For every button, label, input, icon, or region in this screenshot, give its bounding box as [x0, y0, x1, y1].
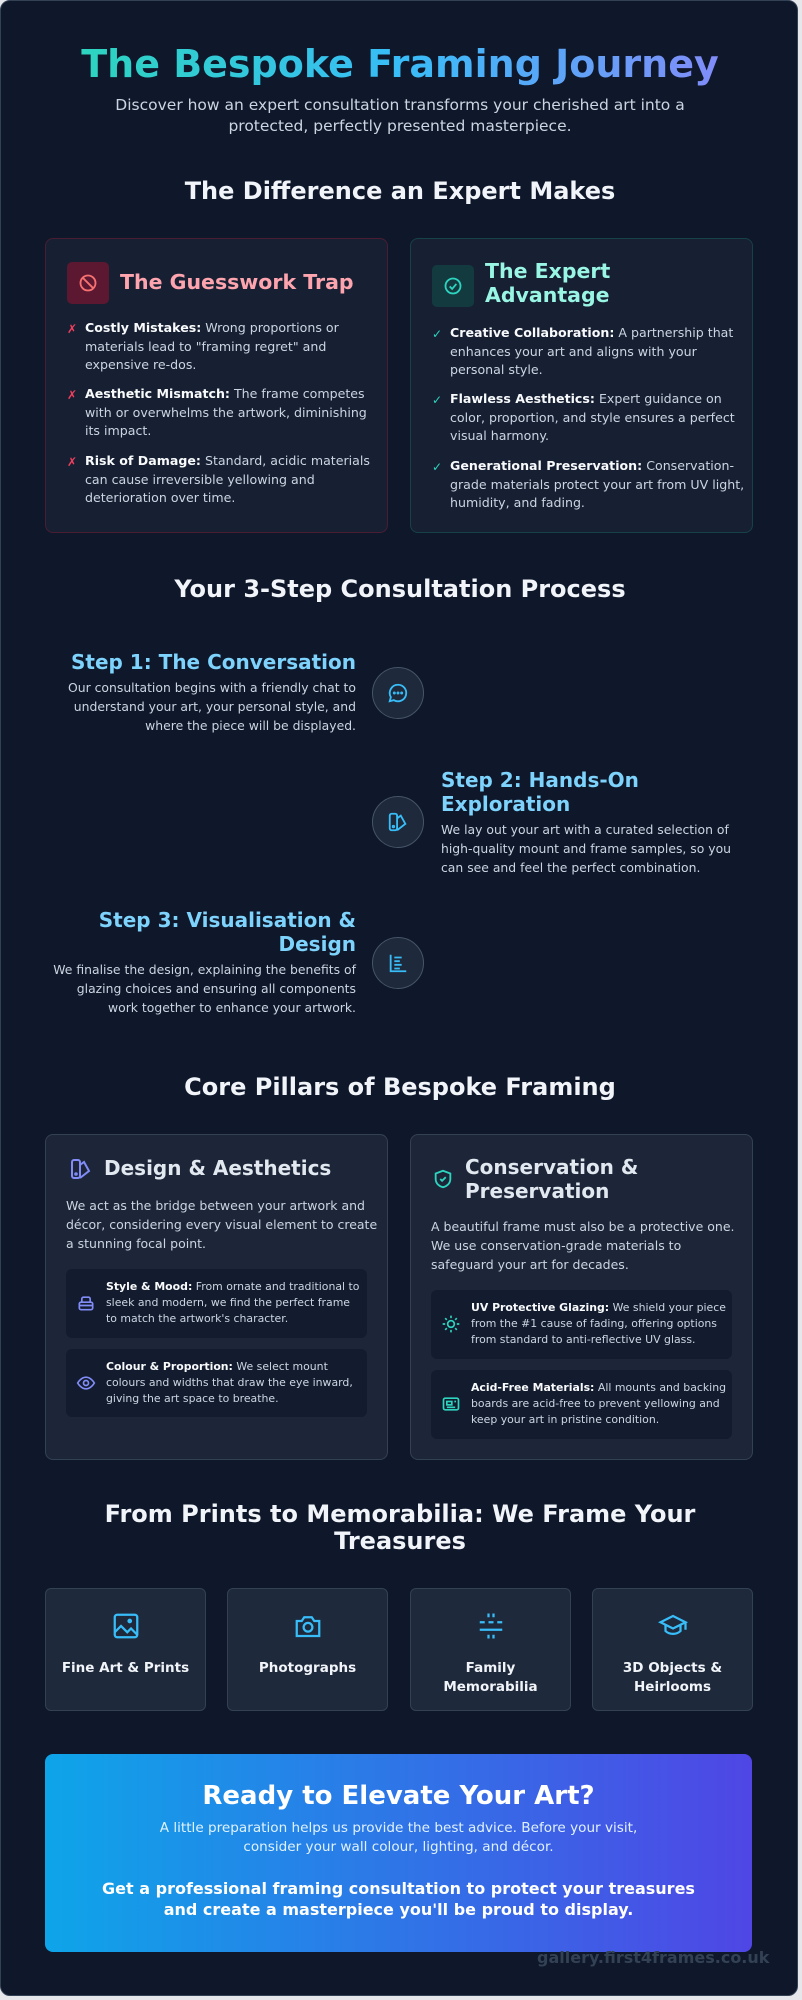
- step 1: [68, 650, 356, 733]
- list: aesthetics: Flawless Aesthetics: Expert guidance on color, proportion, and style ensures a perfect visual harmony.: [450, 391, 735, 443]
- CTA text: A little preparation helps us provide the best advice. Before your visit,: [160, 1820, 637, 1836]
- panel: conservation: [410, 1134, 753, 1460]
- list: collaboration: Creative Collaboration: A partnership that enhances your art and aligns with your personal style.: [450, 325, 733, 377]
- heading: pillars: Core Pillars of Bespoke Framing: [184, 1073, 616, 1101]
- icon: design: [372, 937, 424, 989]
- heading: treasures: Treasures: [334, 1527, 466, 1555]
- list: mistakes: Costly Mistakes: Wrong proportions or materials lead to "framing regret" and expensive re-dos.: [85, 320, 339, 372]
- sub: style: Style & Mood: From ornate and traditional to sleek and modern, we find the perfect frame to match the artwork's character.: [106, 1280, 359, 1325]
- text: conservation: A beautiful frame must also be a protective one. We use conservation-grade materials to safeguard your art for decades.: [431, 1219, 734, 1272]
- watermark: gallery.first4frames.co.uk: [537, 1948, 769, 1967]
- card: memorabilia: [410, 1588, 571, 1711]
- CTA heading: Ready to Elevate Your Art?: [202, 1781, 595, 1811]
- panel: guesswork trap: ✗: [67, 455, 77, 469]
- heading: difference: The Difference an Expert Makes: [185, 177, 615, 205]
- card: memorabilia: Memorabilia: [443, 1679, 538, 1695]
- card: 3d objects: 3D Objects &: [623, 1660, 722, 1676]
- panel: expert advantage: ✓: [432, 460, 442, 474]
- CTA text: consider your wall colour, lighting, and décor.: [243, 1839, 554, 1855]
- sub: colour: Colour & Proportion: We select mount colours and widths that draw the eye inward, giving the art space to breathe.: [106, 1360, 353, 1405]
- icon: check: [432, 265, 474, 307]
- step 3: We finalise the design, explaining the benefits of glazing choices and ensuring all components work together to enhance your artwork.: [53, 962, 356, 1015]
- CTA text: [160, 1820, 637, 1855]
- panel: design: [45, 1134, 388, 1460]
- step 3: [53, 908, 356, 1015]
- step 3: Design: [279, 932, 356, 956]
- heading: conservation: Conservation &: [465, 1155, 638, 1179]
- sub: colour: [66, 1349, 367, 1417]
- subtitle: [115, 96, 685, 135]
- card: memorabilia: Family: [466, 1660, 515, 1676]
- card: photographs: [227, 1588, 388, 1711]
- list: mismatch: Aesthetic Mismatch: The frame competes with or overwhelms the artwork, diminishing its impact.: [85, 386, 367, 438]
- list: preservation: Generational Preservation: Conservation-grade materials protect your art from UV light, humidity, and fading.: [450, 458, 744, 510]
- subtitle: protected, perfectly presented masterpiece.: [228, 117, 572, 135]
- sub: acid-free: [431, 1370, 732, 1439]
- step 2: [441, 768, 731, 875]
- CTA bold: Get a professional framing consultation to protect your treasures: [102, 1879, 695, 1898]
- icon: shield: [434, 1170, 452, 1188]
- heading: treasures: From Prints to Memorabilia: We Frame Your: [105, 1500, 695, 1528]
- heading: expert: Advantage: [485, 283, 610, 307]
- icon: ban: [67, 262, 109, 304]
- title: The Bespoke Framing Journey: [81, 42, 719, 86]
- sub: acid-free: Acid-Free Materials: All mounts and backing boards are acid-free to prevent yellowing and keep your art in pristine condition.: [471, 1381, 726, 1426]
- CTA bold: [102, 1879, 695, 1919]
- heading: expert: [485, 259, 610, 307]
- card: photographs: Photographs: [259, 1660, 356, 1676]
- CTA bold: and create a masterpiece you'll be proud to display.: [164, 1900, 633, 1919]
- panel: guesswork trap: [45, 238, 388, 533]
- sub: UV: UV Protective Glazing: We shield your piece from the #1 cause of fading, offering options from standard to anti-reflective UV glass.: [471, 1301, 726, 1346]
- card: 3d objects: [592, 1588, 753, 1711]
- panel: expert advantage: ✓: [432, 393, 442, 407]
- heading: conservation: [465, 1155, 638, 1203]
- step 3: Step 3: Visualisation &: [99, 908, 356, 932]
- subtitle: Discover how an expert consultation transforms your cherished art into a: [115, 96, 685, 114]
- icon: palette: [71, 1159, 90, 1179]
- text: design: We act as the bridge between your artwork and décor, considering every visual element to create a stunning focal point.: [66, 1198, 377, 1251]
- list: damage: Risk of Damage: Standard, acidic materials can cause irreversible yellowing and deterioration over time.: [85, 453, 370, 505]
- panel: expert advantage: ✓: [432, 327, 442, 341]
- sub: UV: [431, 1290, 732, 1359]
- heading: process: Your 3-Step Consultation Process: [174, 575, 626, 603]
- icon: swatch: [372, 796, 424, 848]
- step 1: Step 1: The Conversation: [71, 650, 356, 674]
- panel: guesswork trap: ✗: [67, 322, 77, 336]
- CTA banner: [45, 1754, 752, 1952]
- panel: expert advantage: [410, 238, 753, 533]
- card: fine art: Fine Art & Prints: [62, 1660, 189, 1676]
- panel: guesswork trap: ✗: [67, 388, 77, 402]
- card: fine art: [45, 1588, 206, 1711]
- heading: guesswork: The Guesswork Trap: [120, 270, 354, 294]
- sub: style: [66, 1269, 367, 1338]
- icon: chat: [372, 667, 424, 719]
- heading: conservation: Preservation: [465, 1179, 609, 1203]
- heading: treasures: [105, 1500, 696, 1555]
- card: 3d objects: Heirlooms: [634, 1679, 711, 1695]
- step 2: We lay out your art with a curated selection of high-quality mount and frame samples, so you can see and feel the perfect combination.: [441, 822, 731, 875]
- step 2: Exploration: [441, 792, 570, 816]
- step 2: Step 2: Hands-On: [441, 768, 639, 792]
- step 1: Our consultation begins with a friendly chat to understand your art, your personal style, and where the piece will be displayed.: [68, 680, 356, 733]
- heading: expert: The Expert: [485, 259, 610, 283]
- heading: design: Design & Aesthetics: [104, 1156, 331, 1180]
